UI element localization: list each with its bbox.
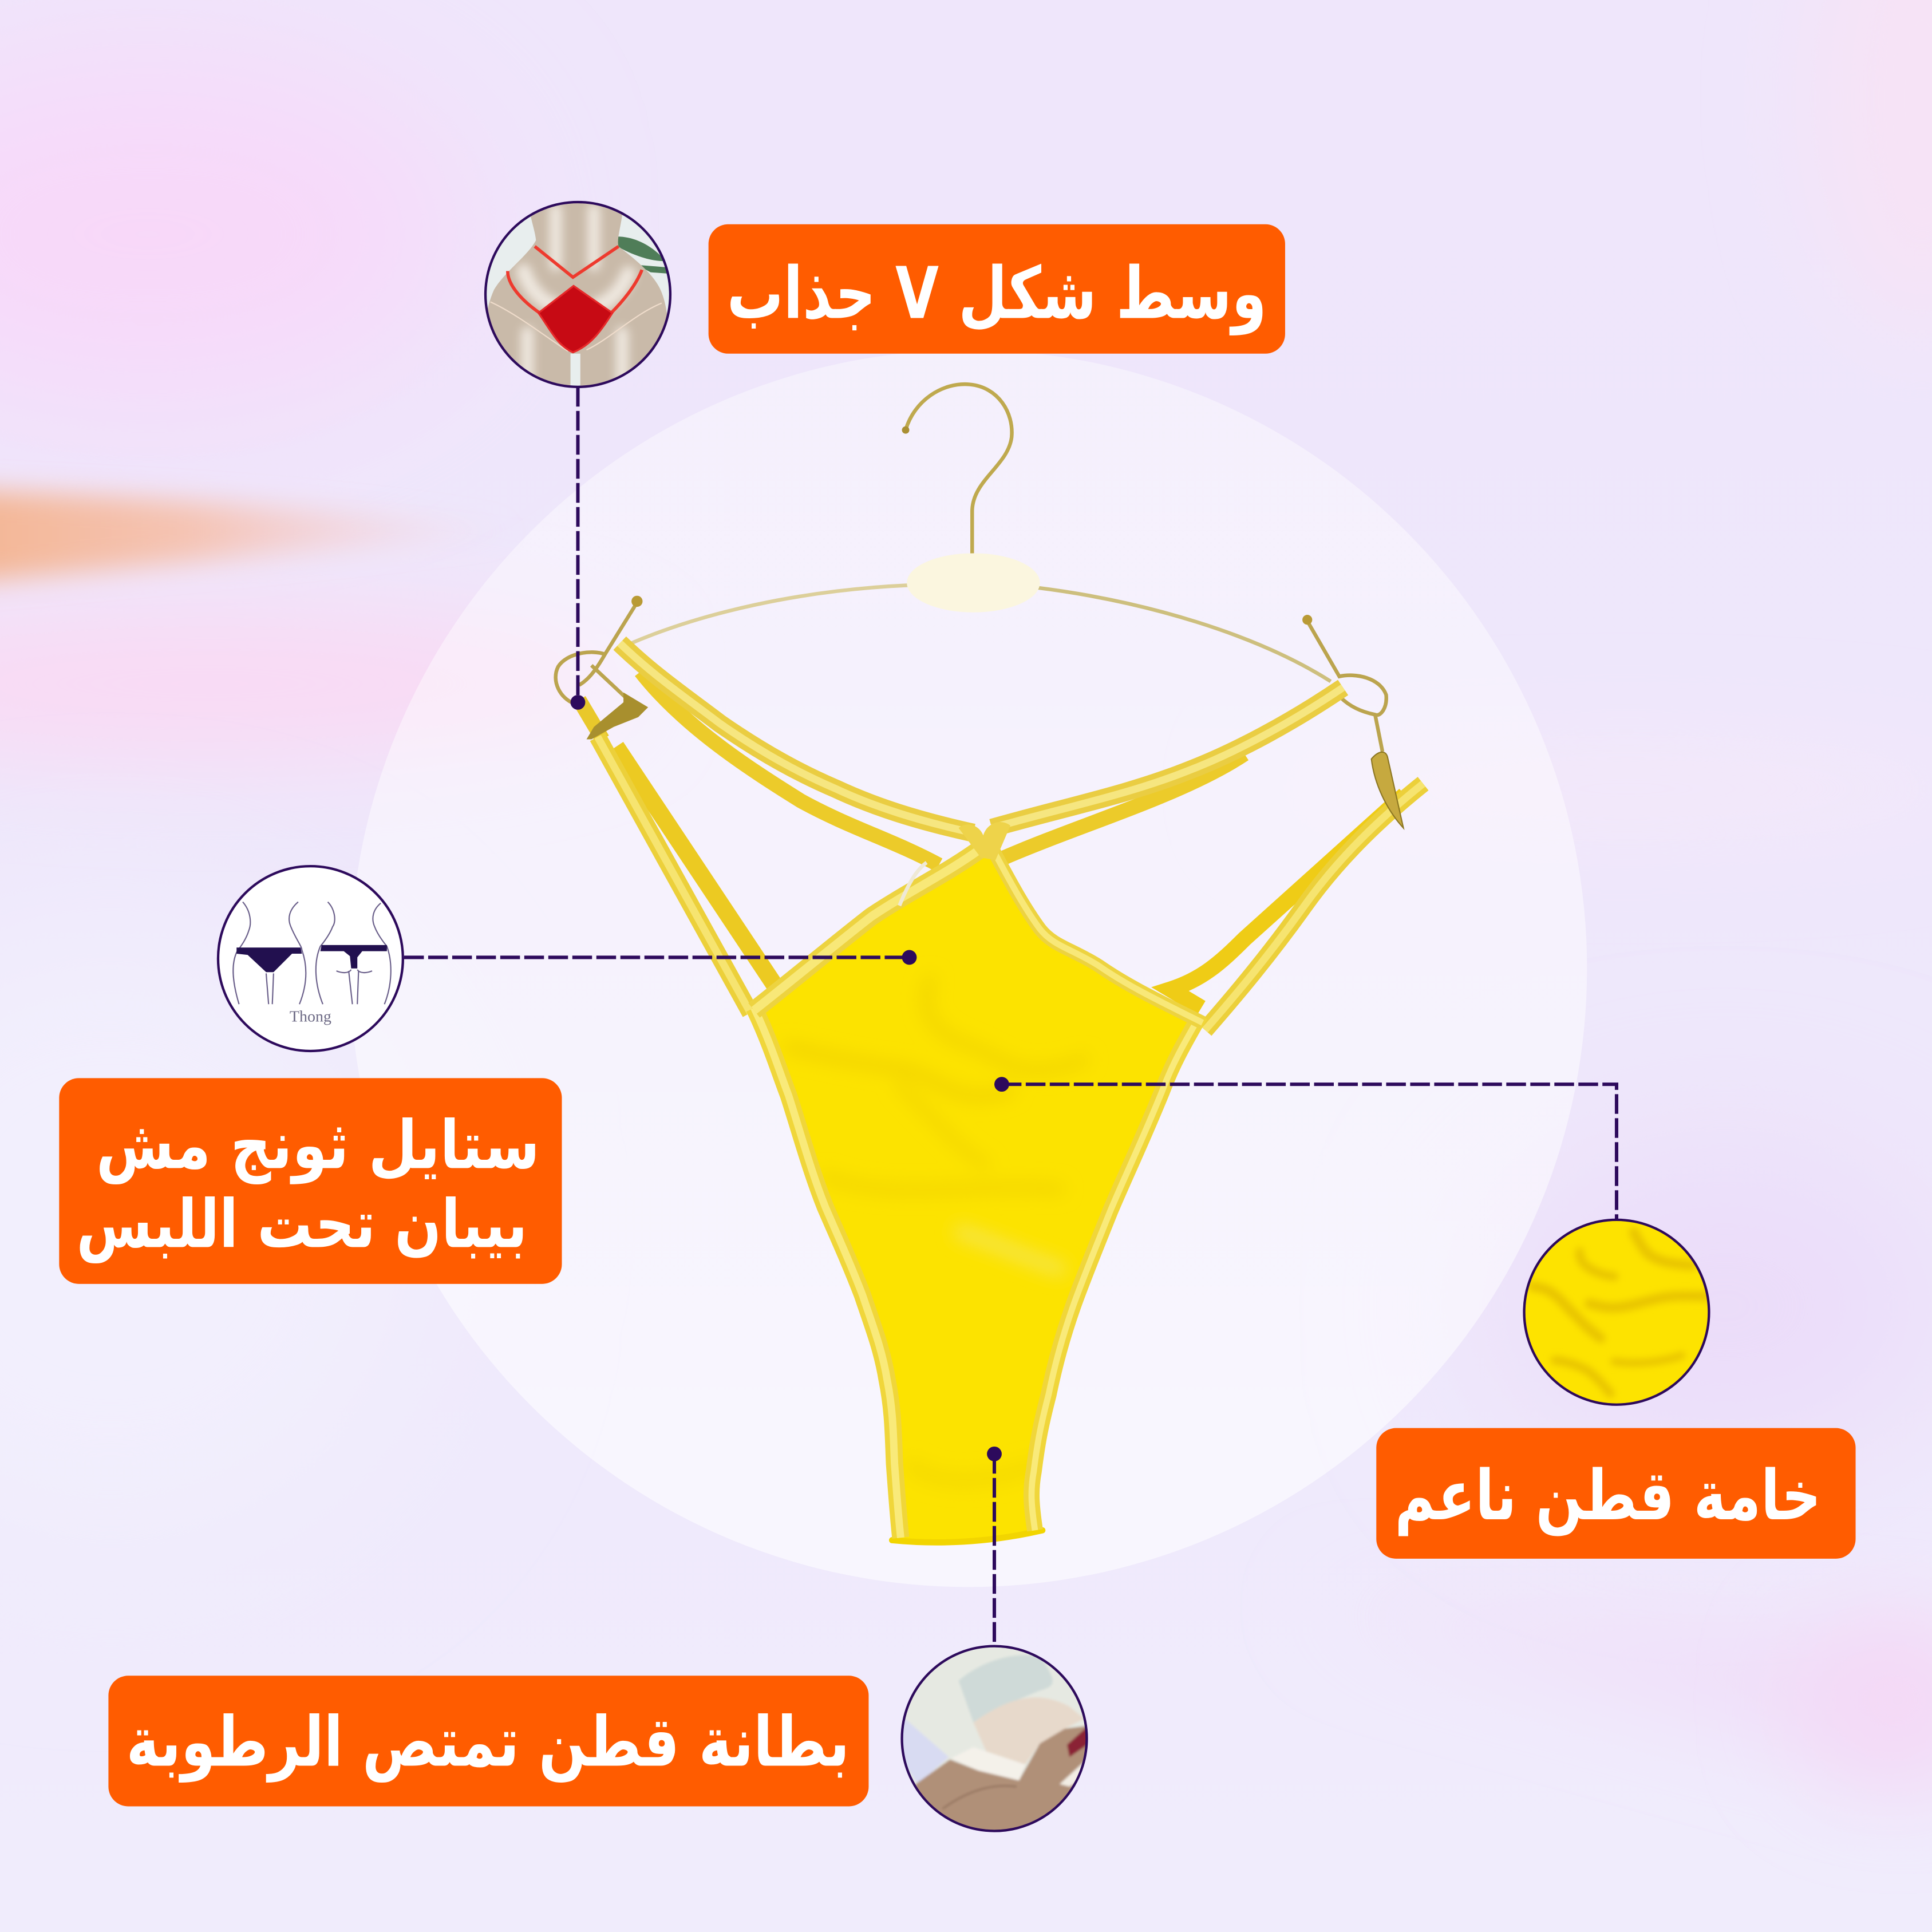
left clip [587,693,648,739]
connector line [577,387,579,702]
thumbnail: thong icon: Thong [290,1008,331,1025]
label box [108,1676,868,1806]
label box [709,224,1285,354]
callout: soft cotton material [994,1077,1856,1559]
hanger plate [907,553,1040,613]
side straps [579,700,1423,1030]
connector line [994,1454,995,1646]
callout: moisture-absorbing cotton lining [108,1447,1097,1842]
product: clips [587,693,1404,828]
panel trim left and right [754,1008,1200,1538]
large pale circle behind product [350,350,1587,1587]
label text line 2: بيبان تحت اللبس [76,1186,527,1263]
connector dot [987,1447,1002,1461]
hem [892,1530,1042,1542]
panel trim upper edges [754,848,1203,1023]
connector dot [902,950,916,965]
thumbnail: thong icon [218,866,403,1051]
under strands [616,671,1405,1008]
main panel [757,849,1198,1542]
connector line [1002,1084,1617,1220]
callout: V-shaped waist [482,197,1285,710]
label text: بطانة قطن تمتص الرطوبة [127,1702,850,1783]
centre knot [959,822,1010,860]
hanger wire right [1037,588,1331,681]
label text line 1: ستايل ثونج مش [96,1107,540,1184]
connector line [404,957,909,958]
right clip [1372,752,1404,828]
connector dot [994,1077,1009,1092]
callout: thong style [59,866,916,1284]
label text: وسط شكل V جذاب [727,252,1267,335]
product: hanger [556,384,1386,752]
thumbnail: yellow fabric [1524,1220,1709,1405]
label box [59,1078,562,1284]
hanger wire left [629,585,908,645]
waist straps [620,643,1343,833]
safety pin detail [899,863,927,906]
thumbnail: mannequin with red garment [482,197,670,394]
product: yellow thong [579,643,1423,1542]
hanger hook [906,384,1012,553]
connector dot [571,695,585,710]
label text: خامة قطن ناعم [1395,1456,1821,1536]
thumbnail: lining held in hand [894,1639,1097,1842]
right hanger hook and prong [1307,621,1386,752]
label box [1376,1428,1856,1559]
fabric folds [789,979,1084,1480]
left hanger hook and prong [556,603,637,704]
